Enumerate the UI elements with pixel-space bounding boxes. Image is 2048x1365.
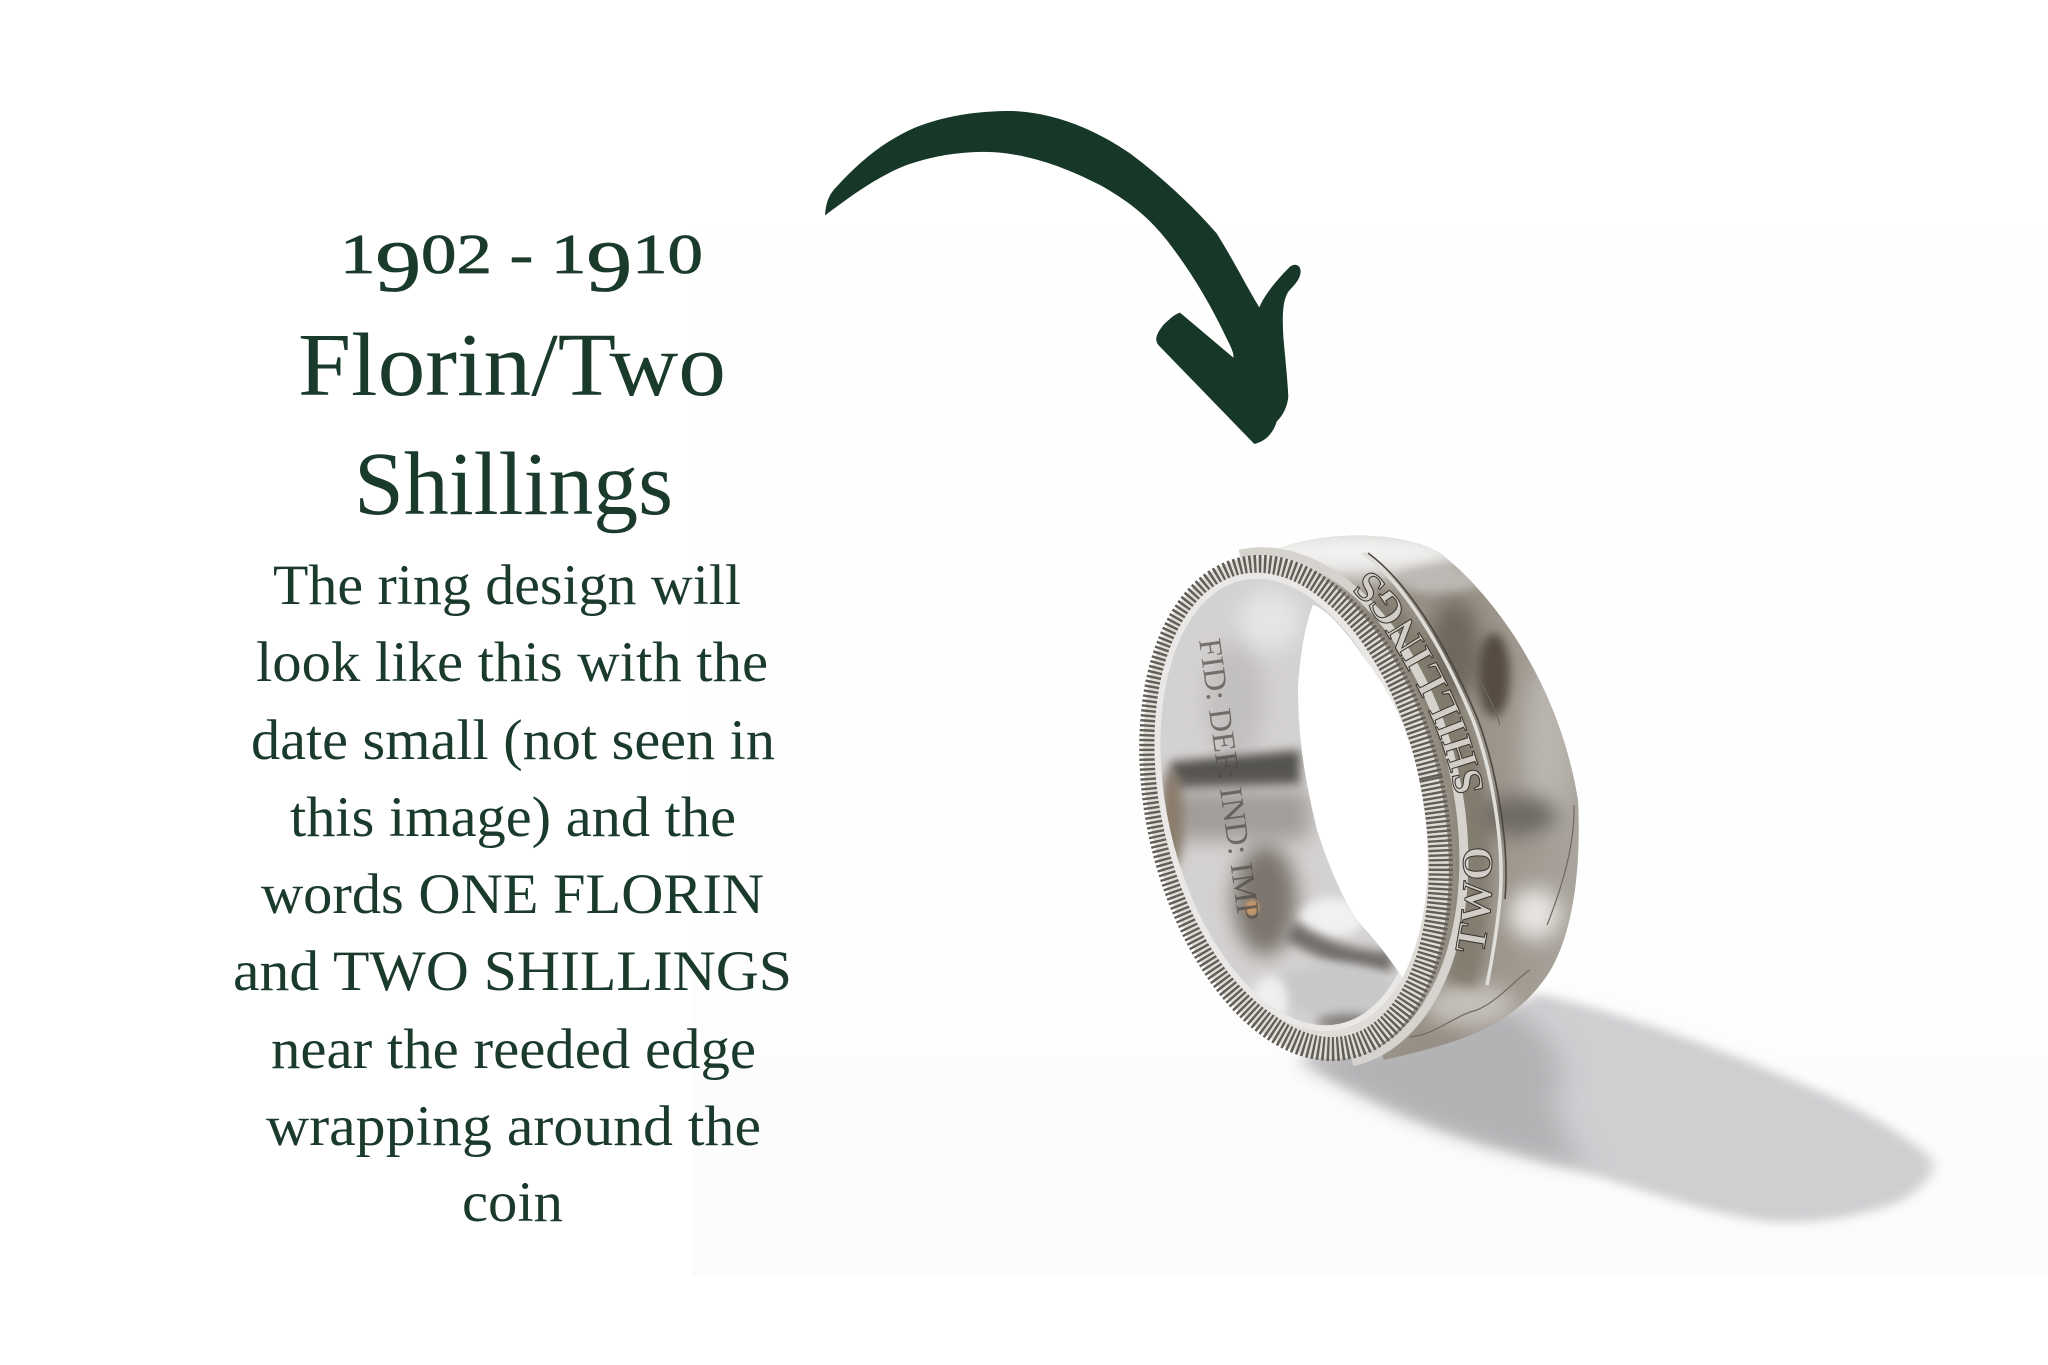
date heading: 9	[586, 227, 632, 307]
date heading: 1	[340, 224, 368, 286]
description text: look like this with the	[256, 631, 768, 694]
coin ring photo	[1139, 536, 1579, 1066]
description text: near the reeded edge	[271, 1018, 756, 1081]
description text: and TWO SHILLINGS	[233, 940, 792, 1003]
description text: coin	[462, 1171, 563, 1234]
title	[298, 316, 726, 534]
cast shadow of the ring	[1300, 993, 1933, 1222]
description text: wrapping around the	[266, 1095, 761, 1158]
description text: this image) and the	[290, 786, 736, 849]
edge lettering: TWO SHILLINGS	[1353, 572, 1492, 952]
photo background	[692, 0, 2048, 1275]
reeded coin rim	[1097, 519, 1510, 1093]
title: Florin/Two	[298, 316, 726, 415]
date heading: 10	[632, 224, 703, 286]
date heading: 02 - 1	[421, 224, 586, 286]
edge lettering path	[1360, 562, 1492, 955]
ring outer band	[1272, 536, 1579, 1060]
description text: words ONE FLORIN	[261, 863, 764, 926]
inner engraved text: FID: DEF: IND: IMP	[1192, 636, 1267, 923]
title: Shillings	[354, 435, 673, 534]
description text: date small (not seen in	[251, 709, 775, 772]
curved arrow	[825, 111, 1301, 444]
description text	[233, 554, 792, 1234]
description text: The ring design will	[273, 554, 741, 617]
ring inner wall and opening	[1154, 572, 1428, 1031]
date heading: 9	[375, 227, 421, 307]
